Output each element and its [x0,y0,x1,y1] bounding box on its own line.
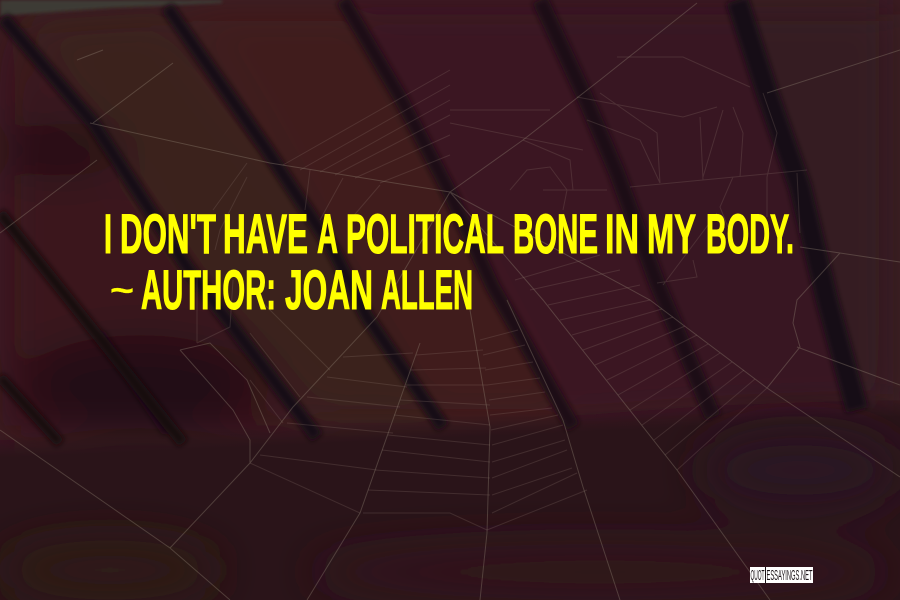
quote text: BONE [513,202,598,265]
quote text [104,202,794,265]
quote text: BODY. [706,202,794,265]
text: ALLEN [381,258,473,321]
quote text: MY [647,202,696,265]
author line: JOAN [285,258,373,321]
floor [0,400,900,600]
quote text: HAVE [223,202,308,265]
author line: AUTHOR: [141,258,276,321]
quote text: A [317,202,338,265]
watermark badge: QUOT [750,567,764,584]
quote text: IN [605,202,639,265]
top left light band [0,0,222,16]
author line: ~ [110,272,134,308]
quote text: DON'T [120,202,216,265]
quote text: I [104,202,112,265]
watermark badge [750,567,813,584]
text: ESSAYINGS.NET [766,567,812,584]
quote text: POLITICAL [346,202,504,265]
